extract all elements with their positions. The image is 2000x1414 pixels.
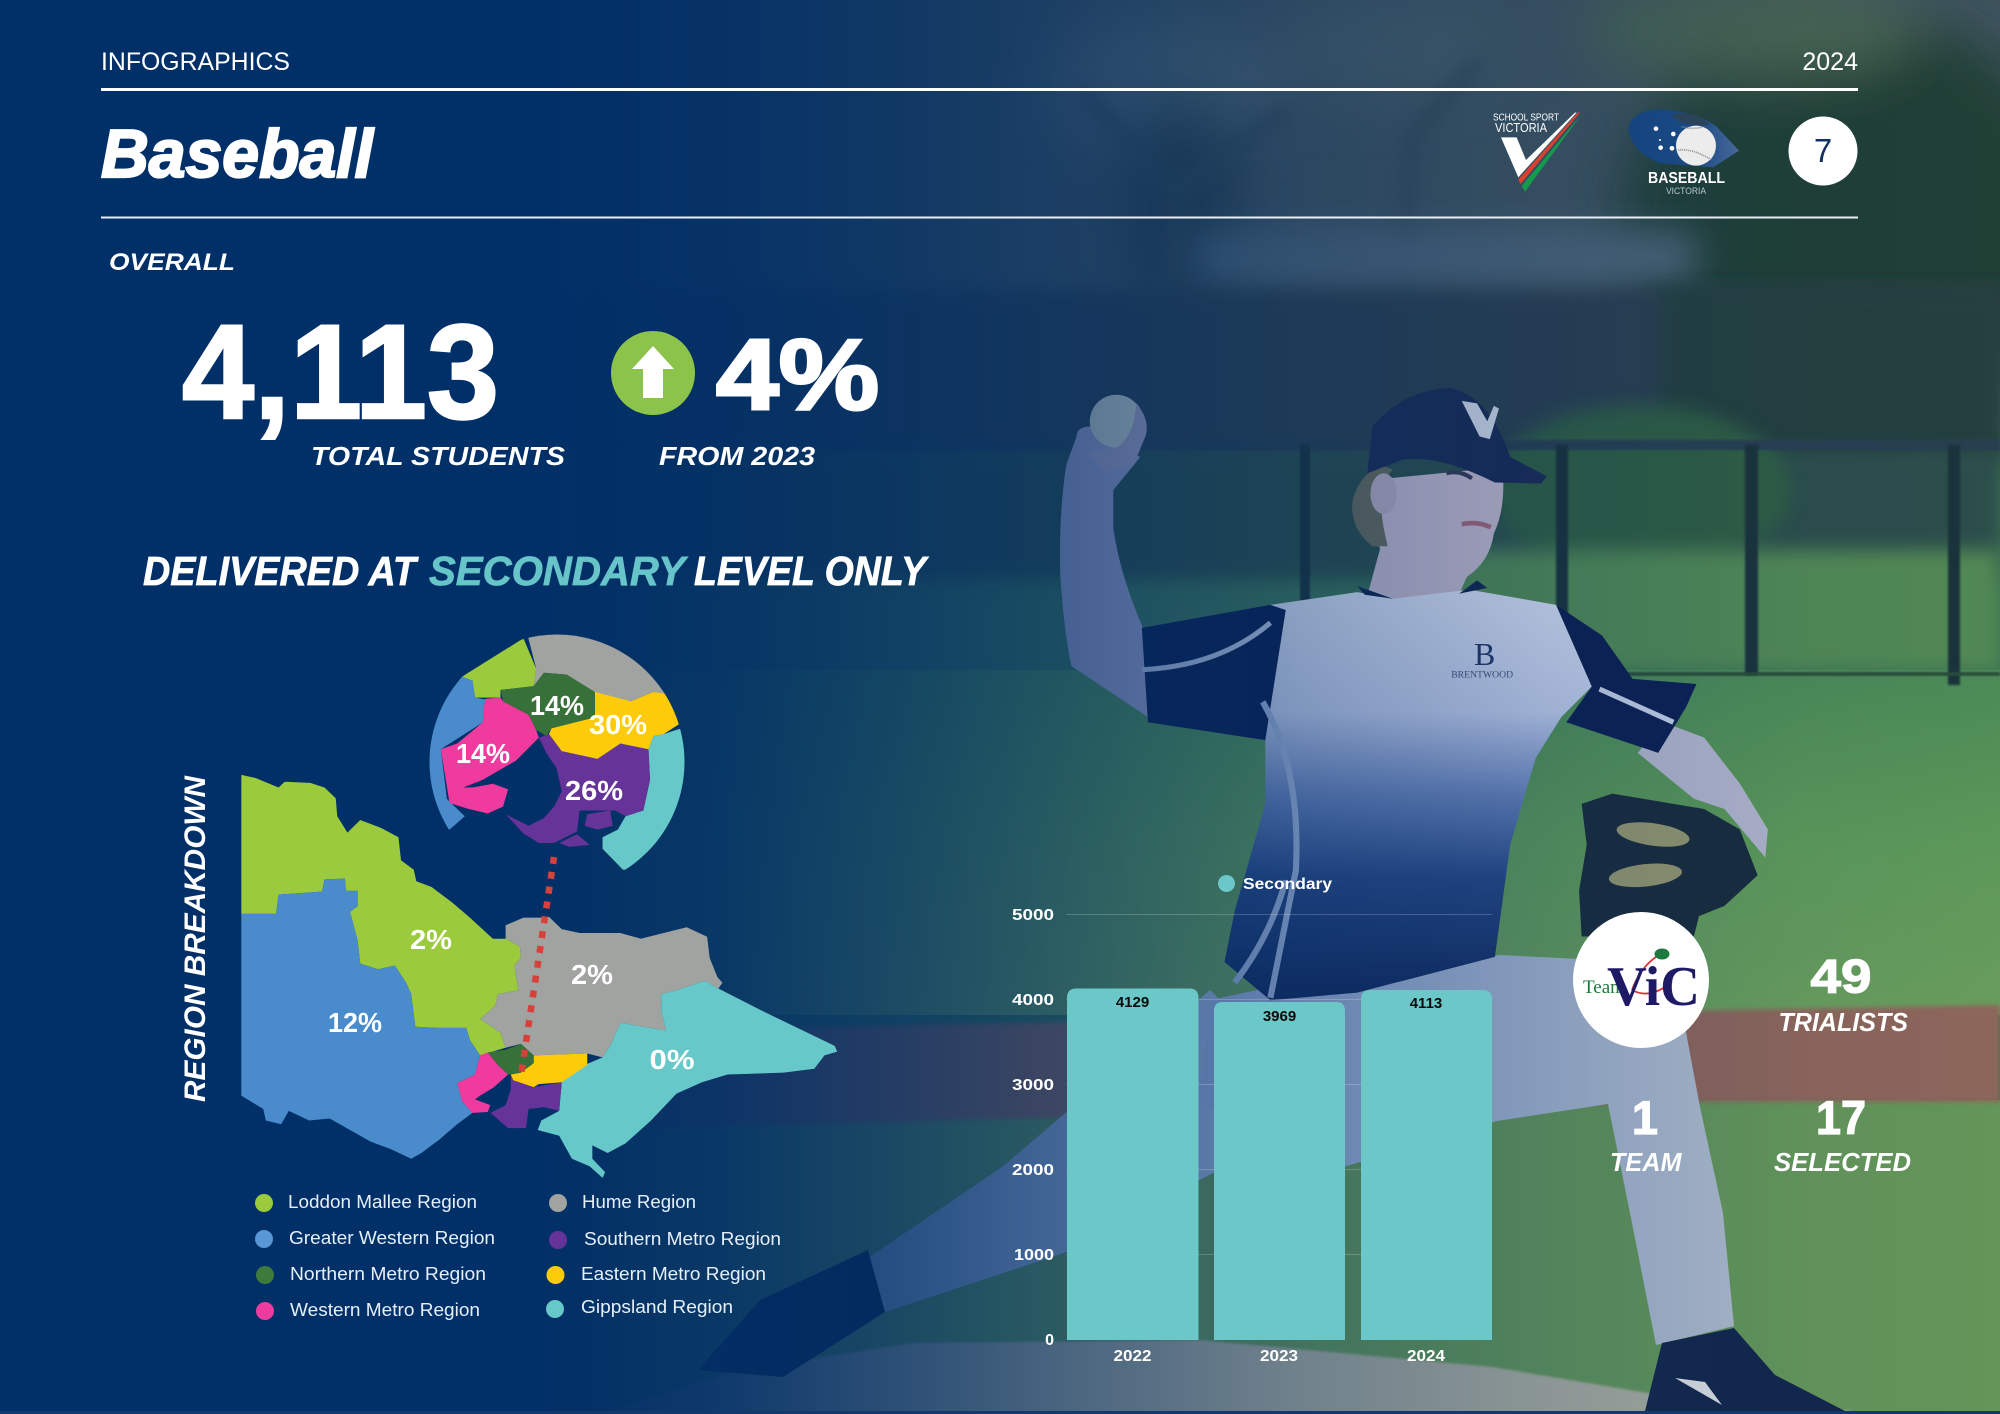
map label: Greater Western: 12% — [328, 1007, 382, 1038]
inset map: Melbourne metro regions — [430, 634, 684, 870]
logo: School Sport Victoria — [1493, 112, 1583, 192]
stat: team — [1610, 1091, 1683, 1177]
logo: Baseball Victoria: VICTORIA — [1666, 186, 1706, 196]
header label: INFOGRAPHICS — [101, 48, 290, 76]
stat: selected: SELECTED — [1774, 1147, 1911, 1177]
headline stat: total students: TOTAL STUDENTS — [311, 441, 566, 471]
inset label: Southern Metro: 26% — [565, 775, 623, 806]
bar: 2023: 3969 — [1263, 1008, 1296, 1025]
bar: 2024: 4113 — [1410, 995, 1442, 1012]
map legend: Northern Metro Region — [290, 1264, 486, 1284]
y axis labels: 5000 — [1012, 907, 1054, 924]
map legend: Gippsland Region — [581, 1297, 733, 1317]
map legend: Greater Western Region — [289, 1228, 495, 1248]
map legend — [255, 1192, 781, 1320]
map legend: Southern Metro Region — [584, 1229, 781, 1249]
y axis labels: 2000 — [1012, 1162, 1054, 1179]
map legend: Western Metro Region — [290, 1300, 480, 1320]
page number badge: 7 — [1814, 132, 1832, 169]
change stat: up 4% from 2023 — [611, 319, 879, 471]
bar: 2023 — [1214, 1002, 1345, 1365]
map: Victoria regions — [241, 775, 837, 1178]
icon: up arrow — [611, 331, 695, 415]
bar chart: participation by year — [1012, 875, 1492, 1365]
bar: 2023: 2023 — [1260, 1348, 1298, 1365]
bar: 2022: 2022 — [1114, 1348, 1152, 1365]
section label: overall: OVERALL — [109, 249, 235, 276]
map legend: Eastern Metro Region — [581, 1264, 766, 1284]
heading: delivered at secondary level only — [143, 548, 929, 594]
logo: School Sport Victoria: VICTORIA — [1495, 121, 1548, 135]
stat: team: TEAM — [1610, 1147, 1683, 1177]
background photo: pitcher on a baseball field: B — [1474, 637, 1495, 672]
inset label: Northern Metro: 14% — [530, 690, 584, 721]
stat: selected: 17 — [1816, 1091, 1866, 1144]
bar: 2022: 4129 — [1116, 994, 1149, 1011]
stat: trialists: TRIALISTS — [1778, 1007, 1909, 1037]
chart legend: Secondary — [1243, 876, 1332, 893]
stat: selected — [1774, 1091, 1911, 1177]
title: Baseball — [101, 116, 375, 192]
logo: Team Vic badge: Team — [1583, 977, 1625, 998]
logo: Baseball Victoria — [1628, 109, 1739, 196]
heading: delivered at secondary level only: SECONDARY — [429, 548, 689, 594]
bar: 2022 — [1067, 988, 1198, 1365]
y axis labels — [1012, 907, 1054, 1349]
y axis labels: 3000 — [1012, 1077, 1054, 1094]
y axis labels: 1000 — [1014, 1247, 1054, 1264]
heading: delivered at secondary level only: LEVEL ONLY — [694, 548, 929, 594]
change stat: up 4% from 2023: FROM 2023 — [659, 441, 816, 471]
map label: Gippsland: 0% — [650, 1044, 695, 1075]
map label: Loddon Mallee: 2% — [410, 924, 452, 955]
bar: 2024 — [1361, 990, 1492, 1365]
change stat: up 4% from 2023: 4% — [716, 319, 879, 431]
stat: trialists: 49 — [1810, 950, 1872, 1002]
background photo: pitcher on a baseball field: BRENTWOOD — [1451, 669, 1513, 680]
logo: Team Vic badge: ViC — [1607, 956, 1700, 1018]
page number badge — [1788, 116, 1858, 186]
logo: School Sport Victoria: SCHOOL SPORT — [1493, 112, 1559, 124]
bar: 2024: 2024 — [1407, 1348, 1445, 1365]
vertical label: region breakdown: REGION BREAKDOWN — [179, 775, 212, 1102]
stat: trialists — [1778, 950, 1909, 1037]
inset label: Western Metro: 14% — [456, 738, 510, 769]
inset label: Eastern Metro: 30% — [589, 709, 647, 740]
map label: Hume: 2% — [571, 959, 613, 990]
connector: dotted line from map to inset — [521, 857, 554, 1075]
logo: Baseball Victoria: BASEBALL — [1648, 170, 1725, 187]
heading: delivered at secondary level only: DELIVERED AT — [143, 548, 419, 594]
header year: 2024 — [1802, 48, 1858, 76]
map legend: Hume Region — [582, 1192, 696, 1212]
headline stat: total students: 4,113 — [182, 298, 499, 447]
y axis labels: 0 — [1045, 1332, 1054, 1349]
map legend: Loddon Mallee Region — [288, 1192, 477, 1212]
chart legend — [1218, 875, 1332, 893]
logo: Team Vic badge — [1573, 912, 1709, 1048]
stat: team: 1 — [1632, 1091, 1658, 1144]
y axis labels: 4000 — [1012, 992, 1054, 1009]
